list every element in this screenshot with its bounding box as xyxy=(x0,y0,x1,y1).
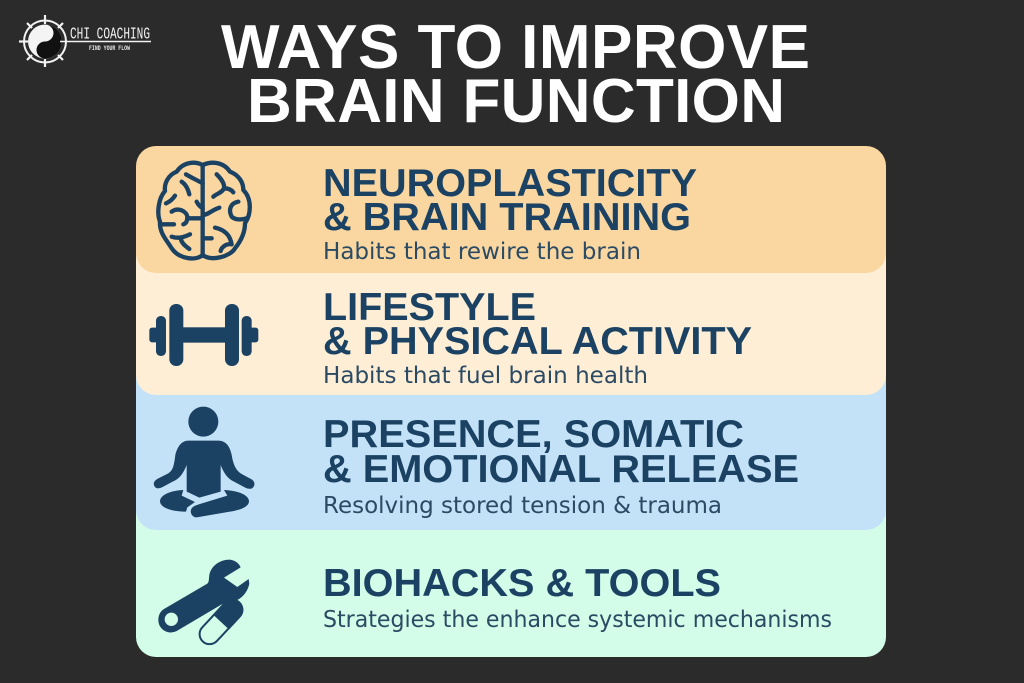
title: BRAIN FUNCTION xyxy=(247,67,785,136)
heading: neuroplasticity: NEUROPLASTICITY xyxy=(323,162,697,205)
logo: Chi Coaching: CHI COACHING xyxy=(70,24,150,44)
logo: Chi Coaching: FIND YOUR FLOW xyxy=(89,45,130,52)
panel: presence, somatic and emotional release xyxy=(136,375,886,530)
panel: neuroplasticity and brain training xyxy=(136,146,886,273)
logo: Chi Coaching xyxy=(19,15,151,67)
title xyxy=(221,13,810,136)
title: WAYS TO IMPROVE xyxy=(221,13,810,82)
subtitle: neuroplasticity: Habits that rewire the brain xyxy=(323,239,641,265)
panel: neuroplasticity and brain training: & BRAIN TRAINING xyxy=(323,196,691,239)
subtitle: presence: Resolving stored tension & trauma xyxy=(323,493,722,519)
icon: wrench and capsule xyxy=(158,560,249,649)
icon: meditating figure xyxy=(154,407,254,517)
heading: biohacks: BIOHACKS & TOOLS xyxy=(323,562,721,605)
icon: brain xyxy=(158,163,250,258)
panel: presence, somatic and emotional release: & EMOTIONAL RELEASE xyxy=(323,448,799,491)
panel: biohacks and tools xyxy=(136,505,886,657)
icon: dumbbell xyxy=(149,304,258,366)
heading: lifestyle: LIFESTYLE xyxy=(323,286,536,329)
subtitle: lifestyle: Habits that fuel brain health xyxy=(323,363,648,389)
heading: presence: PRESENCE, SOMATIC xyxy=(323,413,744,456)
panel: lifestyle and physical activity xyxy=(136,250,886,395)
panel: lifestyle and physical activity: & PHYSICAL ACTIVITY xyxy=(323,320,752,363)
subtitle: biohacks: Strategies the enhance systemic mechanisms xyxy=(323,607,832,633)
